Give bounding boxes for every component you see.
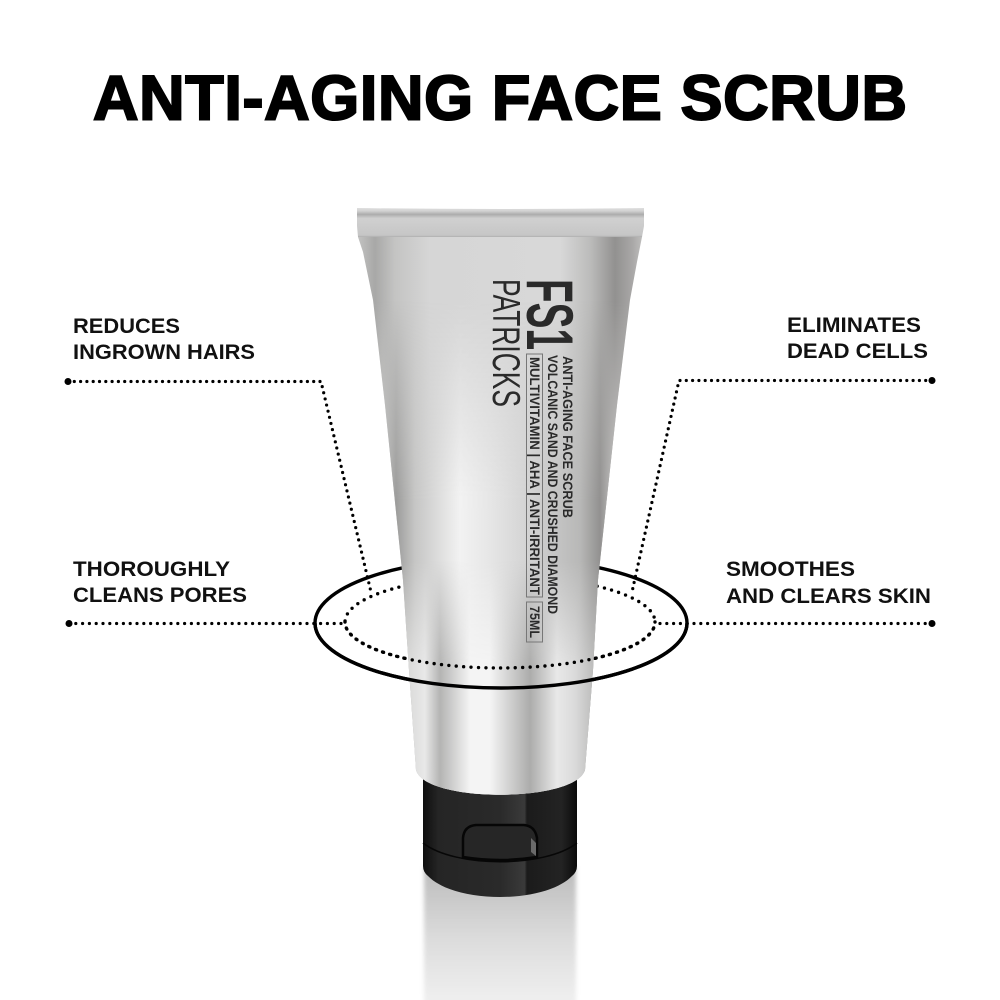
label: anti-aging face scrub: ANTI-AGING FACE SCRUB	[560, 356, 576, 518]
title: ANTI-AGING FACE SCRUB	[93, 64, 907, 134]
callout: thoroughly cleans pores	[66, 558, 345, 627]
callout: thoroughly cleans pores: CLEANS PORES	[73, 584, 247, 607]
tube cap	[423, 778, 577, 897]
callout: thoroughly cleans pores: THOROUGHLY	[73, 558, 230, 581]
ring: front arcs over the tube	[315, 622, 687, 688]
callout: smoothes and clears skin: SMOOTHES	[726, 558, 855, 581]
callout: eliminates dead cells: ELIMINATES	[787, 314, 921, 337]
product reflection	[424, 868, 576, 1000]
callout: smoothes and clears skin: AND CLEARS SKIN	[726, 585, 931, 608]
product: tube and cap	[350, 208, 650, 897]
label: volcanic sand: VOLCANIC SAND AND CRUSHED DIAMOND	[545, 355, 561, 614]
tube crimp	[357, 208, 644, 237]
tube body	[350, 230, 650, 810]
callout: reduces ingrown hairs: INGROWN HAIRS	[73, 341, 255, 364]
label: ingredients: 75ML	[527, 606, 543, 638]
label: PATRICKS: PATRICKS	[484, 279, 527, 407]
callout leader lines behind tube	[68, 380, 932, 592]
label: ingredients: MULTIVITAMIN | AHA | ANTI-IRRITANT	[527, 357, 543, 595]
label: FS1: FS1	[513, 279, 587, 350]
tube label	[484, 279, 587, 642]
ring: rear arcs behind the tube	[315, 558, 687, 688]
callout: reduces ingrown hairs: REDUCES	[73, 315, 180, 338]
callout: eliminates dead cells	[787, 314, 936, 384]
callout: eliminates dead cells: DEAD CELLS	[787, 340, 928, 363]
callout: smoothes and clears skin	[655, 558, 936, 627]
callout: reduces ingrown hairs	[64, 315, 255, 385]
